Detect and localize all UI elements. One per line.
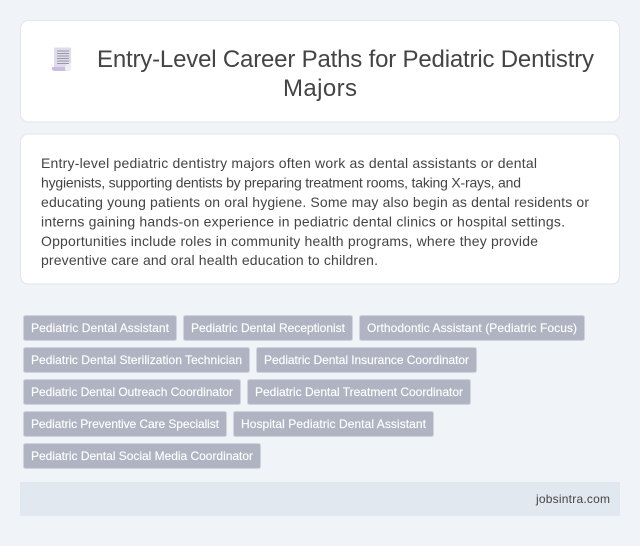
panel: title card (20, 20, 620, 122)
tag: Outreach Coordinator: Pediatric Dental Outreach Coordinator (31, 385, 233, 399)
text block: description paragraph: interns gaining hands-on experience in pediatric dental clinics or hospital settings. (41, 214, 565, 230)
text block: description paragraph (41, 155, 589, 268)
tag: Pediatric Dental Assistant: Pediatric Dental Assistant (31, 321, 170, 335)
heading: title (97, 46, 594, 102)
tag: Insurance Coordinator: Pediatric Dental Insurance Coordinator (264, 353, 469, 367)
tag: Orthodontic Assistant: Orthodontic Assistant (Pediatric Focus) (367, 321, 577, 335)
tag group: career paths (24, 316, 584, 468)
tag: Outreach Coordinator (24, 380, 240, 404)
tag: Sterilization Technician (24, 348, 250, 372)
tag: Pediatric Dental Receptionist (184, 316, 352, 340)
tag: Preventive Care Specialist (24, 412, 226, 436)
tag: Preventive Care Specialist: Pediatric Preventive Care Specialist (31, 417, 220, 431)
tag: Insurance Coordinator (256, 348, 476, 372)
text block: description paragraph: Opportunities include roles in community health programs, where they provide (41, 233, 538, 249)
heading: title: Majors (283, 75, 357, 102)
text block: description paragraph: Entry-level pediatric dentistry majors often work as dental assistants or dental (41, 155, 537, 171)
tag: Hospital Pediatric Dental Assistant: Hospital Pediatric Dental Assistant (241, 417, 427, 431)
icon: paper scroll (52, 48, 71, 71)
tag: Social Media Coordinator: Pediatric Dental Social Media Coordinator (31, 449, 253, 463)
tag: Social Media Coordinator (24, 444, 260, 468)
footer (20, 482, 620, 516)
panel: description (20, 134, 620, 284)
tag: Pediatric Dental Assistant (24, 316, 176, 340)
footer text: source: jobsintra.com (535, 492, 610, 506)
heading: title: Entry-Level Career Paths for Pediatric Dentistry (97, 46, 594, 73)
tag: Sterilization Technician: Pediatric Dental Sterilization Technician (31, 353, 242, 367)
tag: Orthodontic Assistant (360, 316, 584, 340)
tag: Hospital Pediatric Dental Assistant (234, 412, 434, 436)
text block: description paragraph: educating young patients on oral hygiene. Some may also begin as dental residents or (41, 194, 589, 210)
tag: Treatment Coordinator (248, 380, 470, 404)
tag: Treatment Coordinator: Pediatric Dental Treatment Coordinator (255, 385, 463, 399)
text block: description paragraph: preventive care and oral health education to children. (41, 252, 378, 268)
tag: Pediatric Dental Receptionist: Pediatric Dental Receptionist (191, 321, 346, 335)
text block: description paragraph: hygienists, supporting dentists by preparing treatment rooms, taking X-rays, and (41, 174, 521, 190)
